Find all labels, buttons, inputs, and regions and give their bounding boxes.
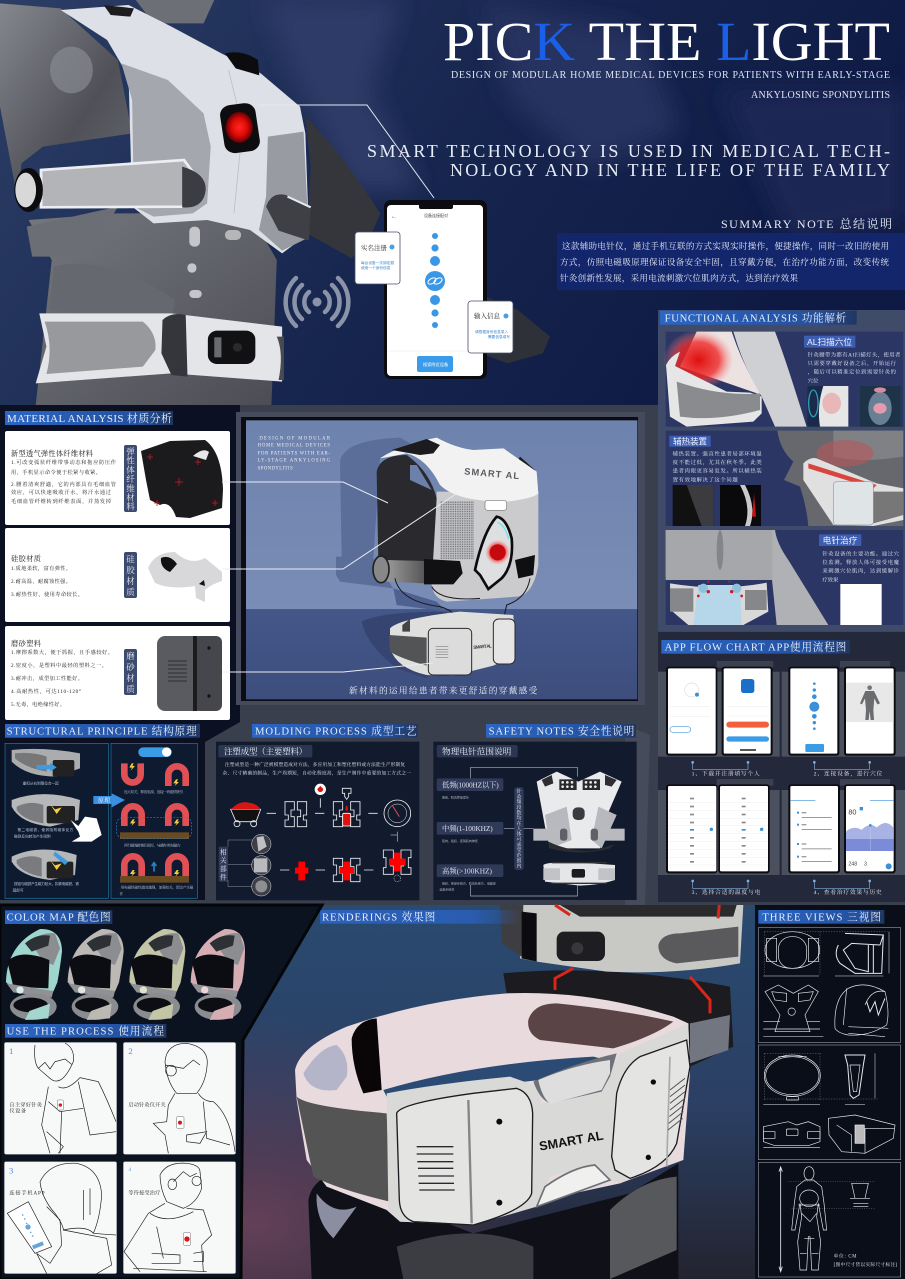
step label 3 — [691, 880, 761, 896]
vest colorway: pink — [191, 929, 245, 1020]
slogan: SMART TECHNOLOGY IS USED IN MEDICAL TECH- — [367, 141, 890, 161]
step 2 card: 启动针灸仪开关 — [128, 1100, 166, 1108]
card: silicone: 2.耐高温，耐腐蚀性强。 — [11, 577, 71, 585]
card: elastic fiber: 体 — [126, 465, 135, 475]
middle band background — [0, 405, 905, 905]
card: real-name registration: 实名注册 — [361, 243, 388, 252]
subtitle — [451, 70, 890, 101]
vertical note: 在 — [517, 820, 522, 827]
sub-panel: AI scanning: 穴位 — [808, 376, 819, 384]
sub-panel: auxiliary heating — [666, 431, 903, 526]
toggle switch — [138, 747, 172, 757]
magnet captions: 连大扣关，释放电源，连接一块磁铁吸引 — [124, 789, 184, 794]
step 2 card: 2 — [128, 1046, 133, 1056]
heading: safety notes: SAFETY NOTES 安全性说明 — [489, 725, 635, 738]
vertical note: 内 — [517, 863, 522, 870]
panel: left bottom background — [0, 905, 322, 1279]
card: silicone: 3.耐热性好，使用寿命较长。 — [11, 590, 83, 598]
card: silicone: 1.质地柔软，富有弹性。 — [11, 564, 71, 572]
sub-panel: AI scanning: ，随后可以精准定位到需要针灸的 — [808, 368, 897, 376]
belt top view — [543, 862, 615, 886]
panel: summary text: 方式，仿照电磁吸原理保证设备安全牢固，且穿戴方便，在治疗功能方面，改变传统 — [560, 257, 889, 268]
card: frosted plastic: 4.高耐热性，可达110-120° — [11, 687, 81, 695]
vertical note: 数 — [517, 809, 522, 816]
material callout lines — [222, 482, 456, 672]
sub-panel: AI scanning: 只需要穿戴好设备之后，开始运行 — [808, 359, 897, 367]
card: enter information — [468, 301, 513, 353]
vest: SMART AL — [464, 466, 520, 481]
back belt reflection — [503, 968, 733, 1067]
card: frosted plastic — [5, 626, 230, 720]
step label 4 — [813, 880, 882, 896]
back belt — [500, 905, 743, 972]
description: 注塑成型是一种广泛被模塑造成对方法，多应用加工和塑化塑料或方法能生产形制复 — [225, 761, 405, 768]
heading: material analysis: MATERIAL ANALYSIS 材质分析 — [7, 411, 172, 425]
icon: silicone shell — [148, 552, 222, 602]
step 3 card: 3 — [9, 1166, 13, 1176]
floating note: FOR PATIENTS WITH EAR- — [258, 451, 330, 456]
panel: color map — [5, 910, 245, 1020]
magnet state C — [120, 856, 189, 883]
step 3 card — [4, 1162, 117, 1274]
high frequency tag — [437, 864, 503, 892]
drawing: belt views — [758, 1045, 901, 1160]
low frequency tag: 低频(1000HZ以下) — [442, 780, 499, 789]
app screen: login — [722, 667, 773, 756]
slogan — [367, 141, 890, 180]
vertical note: 段 — [517, 804, 522, 811]
panel: functional analysis — [658, 310, 905, 632]
heading: use the process: USE THE PROCESS 使用流程 — [7, 1024, 164, 1037]
card: real-name registration: 每台设备一次绑定服 — [361, 260, 394, 265]
sub-panel: auxiliary heating: 置有效地解决了这个问题 — [673, 475, 738, 483]
step label 2 — [813, 761, 883, 777]
vest colorway: teal — [6, 929, 62, 1020]
card: enter information: 需要信息填写 — [488, 334, 510, 339]
phone mockup: 搜索附近设备 — [423, 361, 449, 368]
card: elastic fiber: 性 — [126, 456, 135, 466]
magnet captions: 作 — [119, 891, 123, 896]
vertical note: 人 — [517, 825, 522, 832]
hero background — [0, 0, 905, 405]
vertical note: 均 — [517, 815, 522, 822]
arrow: principle: 原理 — [98, 797, 110, 805]
card: silicone: 胶 — [126, 565, 135, 575]
panel: app flow chart — [658, 632, 905, 902]
sub-panel: electroacupuncture: 针灸设备的主要功能。通过穴 — [822, 549, 900, 557]
sub-panel: electroacupuncture — [666, 530, 903, 625]
main belt: SMART AL — [538, 1128, 605, 1154]
app screen: profile avatar — [666, 667, 717, 756]
belt step C — [12, 850, 79, 893]
drawing: human scale: [图中尺寸皆以实际尺寸标注] — [834, 1261, 897, 1268]
callout leader line to phone — [258, 105, 434, 198]
sub-panel: auxiliary heating: 患者肉眼更容易复发。所以辅热装 — [673, 467, 762, 475]
heading: molding process: MOLDING PROCESS 成型工艺 — [255, 725, 417, 738]
belt — [389, 612, 515, 676]
belt step C: 按钮与磁铁产生磁力较大，扣紧电磁铁，紧 — [14, 881, 79, 886]
middle frequency tag: 肌肉、组织、促销肌肉神经 — [442, 838, 478, 843]
panel: molding process — [216, 724, 419, 900]
vertical note — [514, 787, 524, 870]
card: elastic fiber — [5, 431, 230, 525]
floating note: LY-STAGE ANKYLOSING — [258, 459, 331, 464]
step 4 card — [123, 1162, 236, 1274]
vest back view — [533, 772, 625, 852]
left module — [397, 1088, 533, 1225]
step label 1: 1、下载并注册填写个人 — [692, 769, 760, 777]
panel: use the process — [4, 1024, 236, 1274]
step label 1 — [691, 761, 760, 777]
related parts — [219, 834, 271, 896]
related parts: 件 — [220, 872, 227, 881]
vertical note: 频 — [517, 799, 523, 806]
vertical note: 受 — [517, 847, 522, 854]
panel: material analysis — [5, 411, 230, 720]
card: real-name registration: 使用一个身份信息 — [361, 265, 391, 270]
icon: black fiber vest — [141, 440, 223, 518]
belt step B with hand: 第二电磁铁，使其吸附磁体反方 — [17, 827, 74, 832]
description — [223, 761, 411, 777]
card: elastic fiber: 料 — [126, 502, 135, 512]
sub-heading: current range: 物理电针范围说明 — [442, 745, 512, 756]
vertical note: 围 — [517, 857, 522, 864]
step label 3: 3、选择合适的温度与电 — [692, 888, 761, 896]
app screen: temperature list B — [718, 784, 770, 873]
heading: color map: COLOR MAP 配色图 — [7, 911, 111, 924]
app screen: treatment history — [788, 784, 840, 873]
high frequency tag: 设备系统激 — [439, 887, 454, 892]
subtitle: DESIGN OF MODULAR HOME MEDICAL DEVICES FOR PATIENTS WITH EARLY-STAGE — [451, 70, 890, 81]
panel: structural principle — [5, 724, 200, 898]
description: 杂、尺寸精确的制品，生产周期短，自动化程度高，是生产制作中重要的加工方式之一 — [223, 770, 411, 777]
drawing: human scale — [758, 1162, 901, 1277]
sub-panel: AI scanning: 针灸腰带为都有AI扫描灯头，使用者 — [808, 350, 901, 358]
main belt — [295, 993, 690, 1225]
middle frequency tag — [437, 822, 503, 843]
belt step C: 固即可 — [13, 888, 24, 893]
slogan: NOLOGY AND IN THE LIFE OF THE FAMILY — [450, 160, 890, 180]
vertical note: 灸 — [517, 793, 522, 800]
panel: summary text: 针灸创新性发展，采用电流刺激穴位肌肉方式，达到治疗效果 — [560, 273, 798, 284]
vertical note: 范 — [517, 852, 522, 859]
vest colorway: olive — [129, 929, 185, 1020]
low frequency tag: 振痛、肌肉萎缩症状 — [442, 795, 469, 800]
phone mockup: ← — [391, 214, 397, 220]
step label 2: 2、连接设备，进行穴位 — [814, 769, 883, 777]
sub-heading: injection molding: 注塑成型（主要塑料） — [224, 745, 307, 756]
card: elastic fiber: 维 — [126, 483, 135, 493]
vertical note: 承 — [517, 841, 522, 848]
card: elastic fiber: 新型透气弹性体纤维材料 — [11, 449, 94, 458]
hero: figure wearing vest and belt — [0, 0, 560, 412]
belt step B with hand: 磁铁反向转动产生吸附 — [14, 834, 51, 839]
vertical note: 体 — [517, 831, 522, 838]
sub-panel: auxiliary heating: 度不能过低，尤其在秋冬季。此类 — [673, 458, 762, 466]
icon: wireless signal — [286, 278, 348, 326]
middle frequency tag: 中频(1-100KHZ) — [442, 824, 493, 833]
app screen: temperature list A — [666, 784, 717, 873]
card: frosted plastic: 3.耐冲击，成型加工性能好。 — [11, 674, 83, 682]
waist belt — [36, 313, 284, 383]
drawing: human scale: 单位: CM — [834, 1252, 856, 1259]
step 1 card: 1 — [9, 1046, 13, 1056]
app screen: device pairing — [788, 667, 839, 756]
step 1 card — [4, 1042, 117, 1154]
panel: three views — [758, 910, 901, 1277]
card: frosted plastic: 质 — [126, 684, 135, 694]
sub-panel: auxiliary heating: 辅热装置。强直性患者局部环境温 — [673, 449, 762, 457]
card: silicone: 硅 — [126, 554, 135, 564]
panel: summary text: 这款辅助电针仪，通过手机互联的方式实现实时操作，便捷操作，同时一改旧的使用 — [562, 241, 889, 252]
card: elastic fiber: 2.腰着清爽舒適，它的内部具有毛细血管 — [11, 480, 116, 488]
app screen: wave chart: 80 — [848, 807, 856, 816]
heading: structural principle: STRUCTURAL PRINCIPLE 结构原理 — [7, 725, 197, 738]
card: silicone: 材 — [126, 576, 135, 586]
cables — [395, 578, 530, 628]
panel: safety notes — [433, 724, 637, 900]
step 4 card: 等待接受治疗 — [128, 1188, 160, 1196]
vest — [373, 438, 538, 602]
step 4 card: 4 — [129, 1168, 132, 1173]
card: frosted plastic: 2.密度小，是塑料中最轻的塑料之一。 — [11, 661, 107, 669]
card: elastic fiber: 毛细血管纤维转到纤维表面，并蒸发掉 — [11, 497, 112, 505]
card: elastic fiber: 弹 — [126, 446, 135, 456]
belt step B with hand — [12, 794, 102, 842]
sub-panel: electroacupuncture: 位监测。释放人体可接受电魔 — [822, 558, 900, 566]
step 3 card: 连接手机APP — [9, 1188, 45, 1196]
heading: app flow chart: APP FLOW CHART APP使用流程图 — [665, 641, 846, 654]
icon: red light device — [219, 102, 261, 154]
device with red light — [475, 517, 512, 589]
floating note: SPONDYLITIS — [258, 466, 293, 471]
card: real-name registration — [355, 232, 400, 284]
low frequency tag — [437, 778, 503, 800]
drawing: vest views — [758, 928, 901, 1042]
heading: renderings: RENDERINGS 效果图 — [322, 911, 435, 924]
related parts: 关 — [220, 856, 227, 865]
card: elastic fiber: 用，手机显示命令便于松紧与收紧。 — [11, 468, 101, 476]
card: enter information: 请根据身份信息录入 — [475, 329, 508, 334]
heading: three views: THREE VIEWS 三视图 — [762, 910, 881, 923]
magnet captions: 用电磁铁磁性越变越强，加强扣关，固定产生磁 — [121, 884, 194, 889]
subtitle: ANKYLOSING SPONDYLITIS — [751, 90, 890, 101]
magnet state A — [124, 763, 186, 786]
process flow icons — [231, 784, 411, 882]
caption: 新材料的运用给患者带来更舒适的穿戴感受 — [349, 685, 538, 696]
card: elastic fiber: 纤 — [126, 474, 135, 484]
sub-heading: current range — [437, 745, 518, 757]
card: silicone: 质 — [126, 587, 135, 597]
high frequency tag: 高频(>100KHZ) — [442, 866, 493, 875]
sub-panel: electroacupuncture: 来刺激穴位肌肉，达到缓解诊 — [822, 567, 900, 575]
heading: functional analysis: FUNCTIONAL ANALYSIS 功能解析 — [665, 311, 847, 324]
sub-panel: AI scanning — [663, 330, 903, 427]
card: frosted plastic: 1.摩擦系数大，便于抓握，且手感较好。 — [11, 648, 113, 656]
card: elastic fiber: 材 — [126, 492, 135, 502]
card: enter information: 输入信息 — [474, 311, 500, 320]
step 1 card: 自主穿好针灸 — [9, 1100, 43, 1108]
title: PICK THE LIGHT — [443, 11, 890, 72]
app screen: wave chart: 248 — [848, 862, 857, 868]
step 1 card: 仪设备 — [9, 1106, 27, 1114]
card: frosted plastic: 磨 — [126, 651, 135, 661]
related parts: 相 — [220, 847, 227, 856]
table reflection — [308, 1163, 678, 1279]
summary heading: SUMMARY NOTE 总结说明 — [721, 216, 892, 231]
card: frosted plastic: 材 — [126, 673, 135, 683]
belt: SMART AL — [473, 643, 492, 650]
card: elastic fiber: 1.可改变弧状纤维带事动态和拖应防压作 — [11, 458, 116, 466]
phone mockup — [384, 200, 487, 379]
heading: renderings — [320, 910, 520, 924]
app screen: body map — [844, 667, 896, 756]
floating note: DESIGN OF MODULAR — [259, 436, 331, 441]
sub-panel: electroacupuncture: 疗效果 — [822, 575, 839, 583]
floating note: HOME MEDICAL DEVICES — [258, 444, 330, 449]
related parts: 部 — [220, 864, 227, 873]
magnet captions — [119, 789, 194, 896]
card: elastic fiber: 效应，可以快速吸收汗水，将汗水通过 — [11, 488, 111, 496]
magnet captions: 两个磁铁磁性相互排斥，与磁铁中形成磁力 — [124, 842, 181, 847]
panel: vest product render — [236, 412, 645, 705]
vest colorway: warm grey — [68, 929, 124, 1020]
card: frosted plastic: 砂 — [126, 662, 135, 672]
sub-panel: electroacupuncture: 电针治疗 — [823, 534, 858, 545]
arrow: principle — [93, 793, 125, 807]
high frequency tag: 组织、神经系统方、肌肉系统方、电磁感 — [442, 881, 496, 886]
card: silicone: 硅胶材质 — [11, 554, 41, 563]
panel: summary text — [557, 233, 905, 290]
magnet state B — [117, 806, 192, 839]
card: frosted plastic: 5.无毒，电绝缘性好。 — [11, 700, 65, 708]
vertical note: 针 — [517, 788, 522, 795]
belt step A: 重扣从右到限位合一起 — [23, 781, 59, 786]
step 2 card — [123, 1042, 236, 1154]
vertical note: 可 — [517, 836, 522, 843]
bottom right background — [755, 905, 905, 1279]
floating note — [258, 436, 331, 471]
card: frosted plastic: 磨砂塑料 — [11, 639, 42, 648]
icon: plastic housing — [157, 636, 222, 711]
panel: renderings — [240, 905, 755, 1279]
card: silicone — [5, 528, 230, 622]
sub-panel: AI scanning: AL扫描六位 — [807, 336, 852, 347]
app screen: wave chart: 3 — [864, 862, 867, 868]
lightning marks — [129, 763, 180, 877]
step label 4: 4、查看治疗效果与历史 — [814, 888, 882, 896]
right module — [612, 1040, 690, 1178]
belt step A — [12, 749, 80, 786]
phone mockup: 设备连接配对 — [424, 212, 448, 218]
sub-panel: auxiliary heating: 辅热装置 — [673, 435, 707, 446]
app screen: wave chart — [844, 784, 896, 873]
